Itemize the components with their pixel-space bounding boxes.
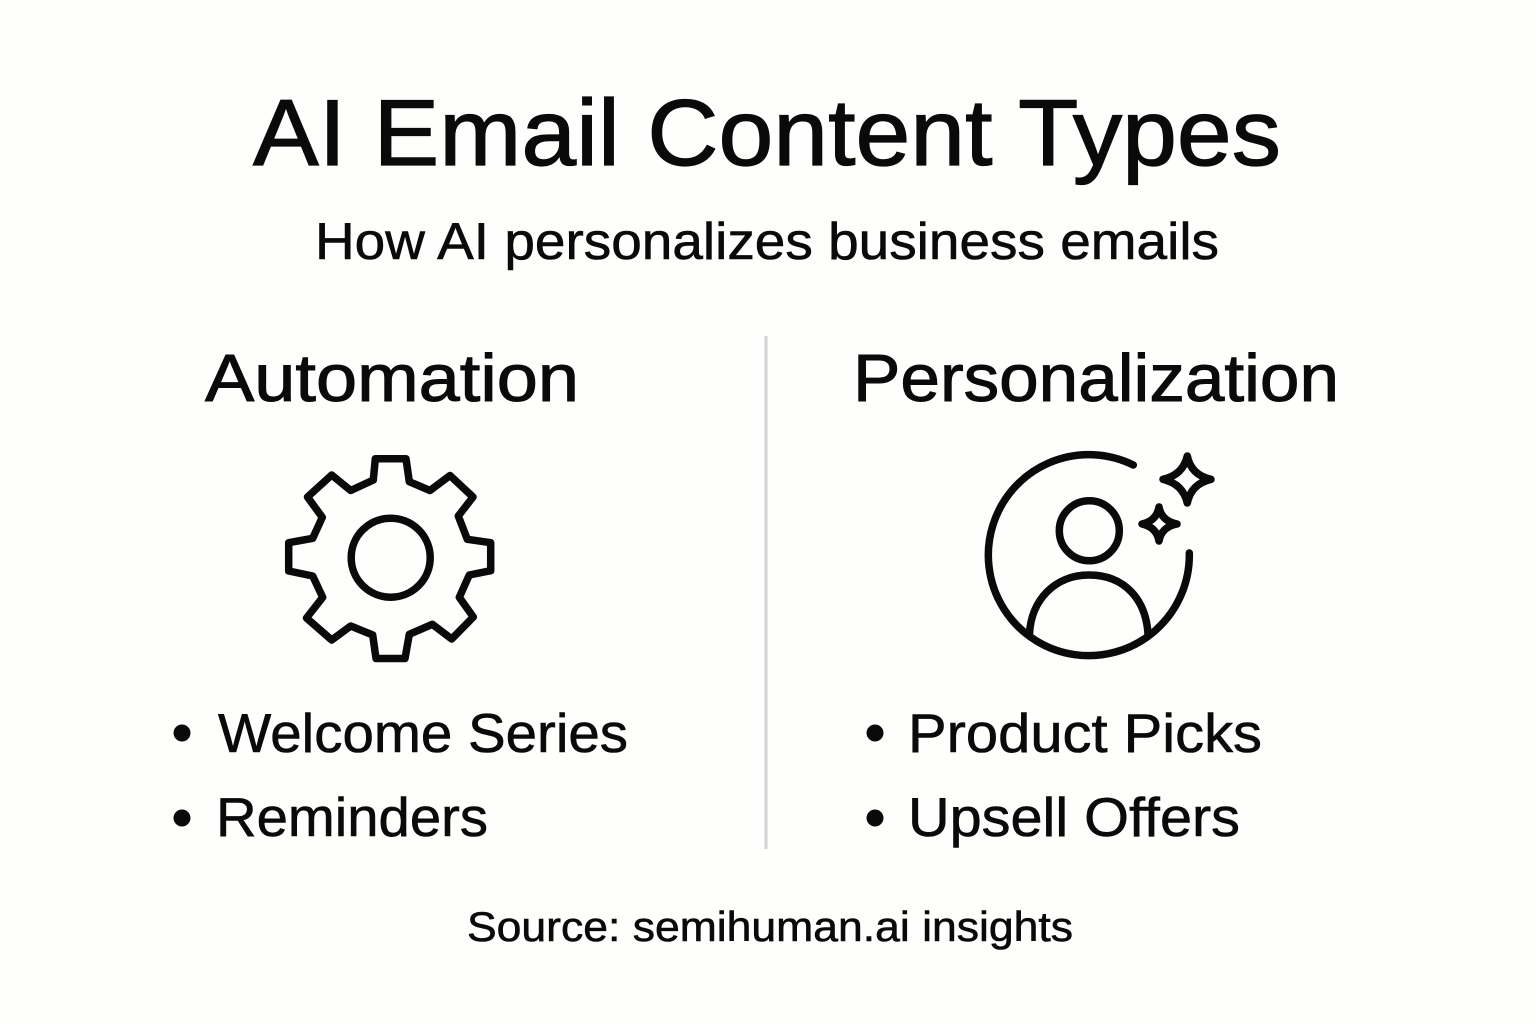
icon: gear <box>289 459 491 658</box>
list: automation items: Welcome Series <box>218 702 628 764</box>
subtitle: How AI personalizes business emails <box>315 213 1219 271</box>
list: personalization items: Upsell Offers <box>908 786 1240 848</box>
list: personalization items <box>866 702 1262 848</box>
source note: Source: semihuman.ai insights <box>467 903 1073 950</box>
heading: automation: Automation <box>205 341 579 416</box>
list: personalization items: Product Picks <box>908 702 1262 764</box>
list: automation items <box>174 702 628 848</box>
title: AI Email Content Types <box>253 80 1281 185</box>
panel: automation <box>174 341 628 848</box>
panel: personalization <box>853 341 1339 848</box>
icon: person with sparkles <box>988 455 1211 656</box>
heading: personalization: Personalization <box>853 341 1339 416</box>
list: automation items: Reminders <box>216 786 488 848</box>
